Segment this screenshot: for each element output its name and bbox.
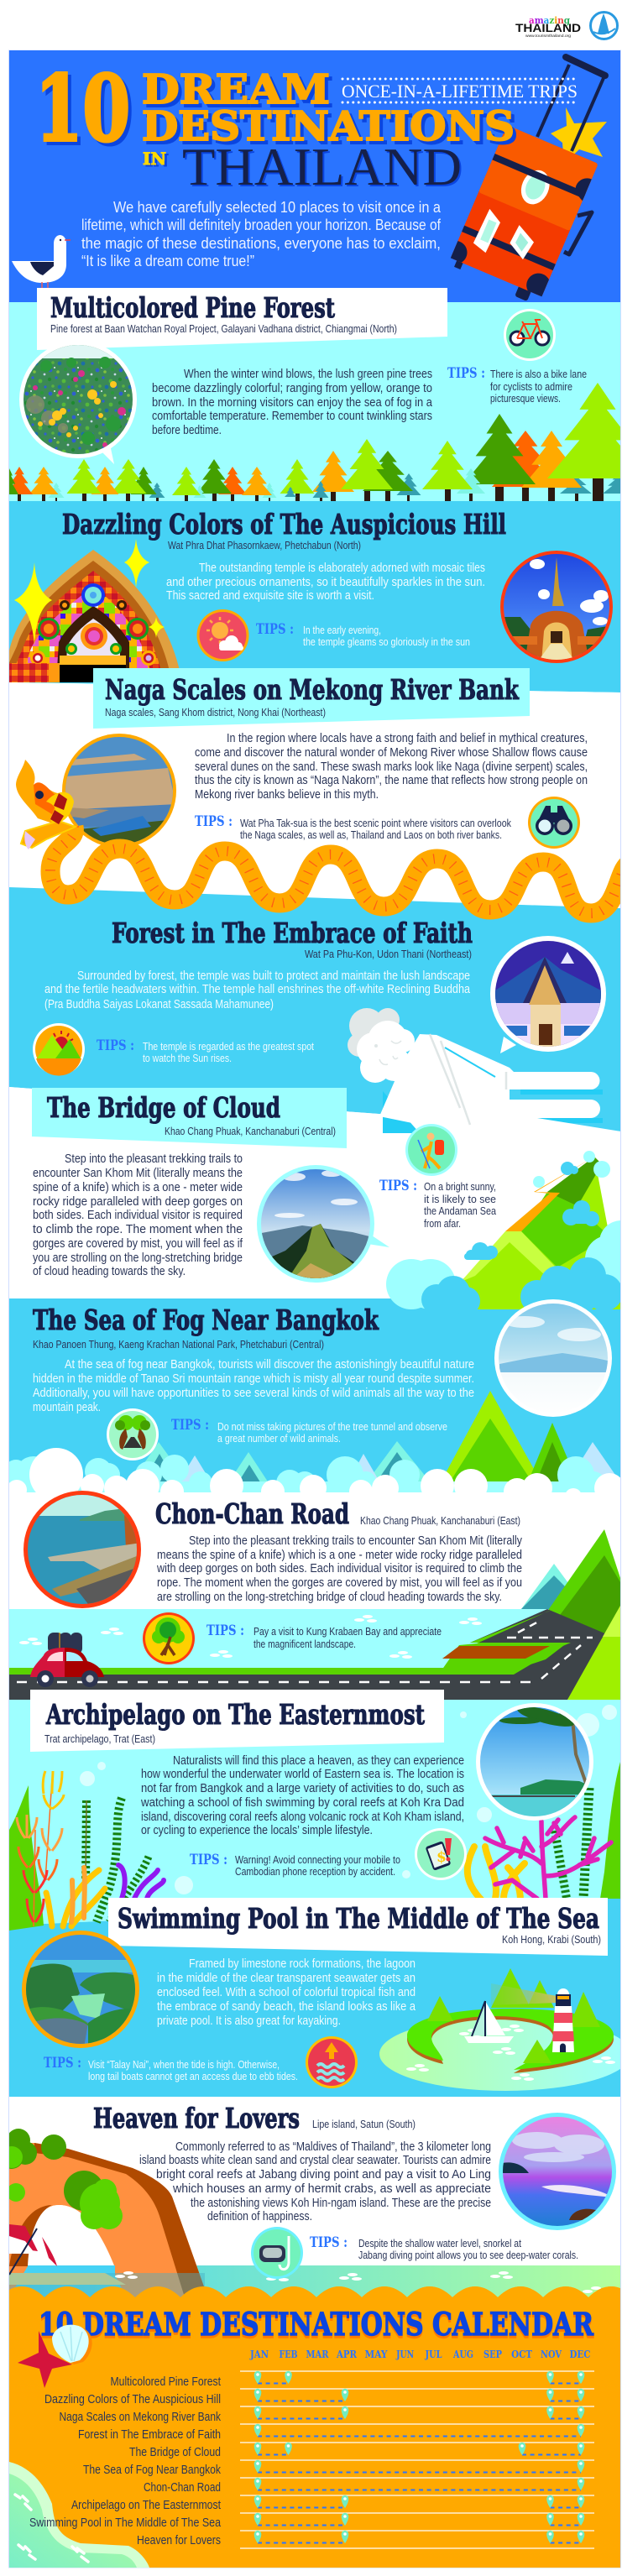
illustration: road mountain xyxy=(521,1529,620,1670)
title box: The Bridge of Cloud xyxy=(47,1091,280,1124)
icon: tree tunnel xyxy=(107,1408,159,1460)
text: Lipe description: Commonly referred to as “Maldives of Thailand”, the 3 kilometer long xyxy=(175,2140,491,2154)
illustration: lagoon island and lighthouse xyxy=(379,1968,622,2091)
panel: Archipelago on The Easternmost xyxy=(9,1690,620,1931)
sparkles xyxy=(14,539,165,646)
icon: phone warning: $ xyxy=(436,1849,447,1866)
tips: sun rises: The temple is regarded as the greatest spot xyxy=(143,1041,314,1053)
clouds xyxy=(4,1448,622,1518)
text: bridge of cloud description: encounter San Khom Mit (literally means the xyxy=(33,1167,243,1180)
text: Lipe description: definition of happiness. xyxy=(207,2210,312,2223)
text: temple description: and other precious ornaments, so it beautifully sparkles in the sun. xyxy=(166,576,485,589)
text: archipelago description: or cycling to experience the locals’ simple lifestyle. xyxy=(141,1824,373,1837)
title: 10 Dream Destinations in Thailand: THAILAND xyxy=(182,137,462,196)
month headers: JUL xyxy=(425,2349,442,2360)
text: introduction: We have carefully selected 10 places to visit once in a xyxy=(113,199,442,216)
tips: early evening: the temple gleams so gloriously in the sun xyxy=(303,636,470,648)
illustration: coral right xyxy=(468,1762,620,1901)
text: lagoon description: private pool. It is also great for kayaking. xyxy=(157,2014,341,2028)
photo: lagoon xyxy=(22,1931,139,2048)
tips: Andaman Sea: On a bright sunny, xyxy=(424,1181,496,1193)
title box xyxy=(108,1898,608,1956)
title: 10 Dream Destinations in Thailand: DESTINATIONS xyxy=(142,103,515,150)
text: bridge of cloud description: Step into the pleasant trekking trails to xyxy=(65,1152,243,1166)
text: sea of fog description: hidden in the middle of Tanao Sri mountain range which is misty all year round despite summer. xyxy=(33,1372,474,1386)
text: pine forest description: comfortable temperature. Remember to count twinkling stars xyxy=(152,410,432,423)
panel: The Bridge of Cloud xyxy=(32,1088,622,1315)
panel: Dazzling Colors of The Auspicious Hill xyxy=(0,508,613,682)
subtitle: once-in-a-lifetime trips: ONCE-IN-A-LIFETIME TRIPS xyxy=(342,81,578,102)
text: bridge of cloud description: of cloud heading towards the sky. xyxy=(33,1265,186,1278)
text: Chon-Chan description: rope. The moment when the gorges are covered by mist, you will feel as if you xyxy=(157,1576,522,1590)
text: archipelago description: Naturalists will find this place a heaven, as they can experience xyxy=(173,1754,464,1768)
title box: Archipelago on The Easternmost xyxy=(45,1698,426,1731)
title box: Naga scales, Sang Khom district, Nong Khai (Northeast) xyxy=(105,706,326,718)
title box: Pine forest at Baan Watchan Royal Project, Galayani Vadhana district, Chiangmai (North) xyxy=(50,322,397,335)
title: Forest in The Embrace of Faith xyxy=(112,917,473,949)
tips: bike lane: for cyclists to admire xyxy=(490,381,572,393)
text: temple description: The outstanding temple is elaborately adorned with mosaic tiles xyxy=(199,562,485,575)
title: Heaven for Lovers xyxy=(93,2102,300,2134)
title: 10 Dream Destinations in Thailand: IN xyxy=(145,150,169,170)
tips: Talay Nai: Visit “Talay Nai”, when the tide is high. Otherwise, xyxy=(88,2059,280,2071)
logo: Amazing Thailand and tourism authority seal xyxy=(515,12,618,39)
destination labels: Naga Scales on Mekong River Bank xyxy=(59,2410,221,2424)
title box: Multicolored Pine Forest xyxy=(50,291,336,324)
destination labels: Multicolored Pine Forest xyxy=(111,2375,222,2389)
text: sea of fog description: At the sea of fog near Bangkok, tourists will discover the astonishingly beautiful nature xyxy=(65,1358,474,1372)
text: lagoon description: the embrace of sandy beach, the island looks as like a xyxy=(157,2000,416,2014)
title: 10 Dream Destinations in Thailand: DESTINATIONS xyxy=(145,107,518,154)
logo: Amazing Thailand and tourism authority seal: www.tourismthailand.org xyxy=(525,34,572,38)
icon: bicycle xyxy=(504,309,556,361)
title: 10 Dream Destinations in Thailand: 10 xyxy=(35,56,130,162)
destination labels: Forest in The Embrace of Faith xyxy=(78,2427,221,2442)
text: archipelago description xyxy=(140,1754,464,1837)
calendar pins xyxy=(254,2371,584,2543)
tips: Andaman Sea: the Andaman Sea xyxy=(424,1205,496,1217)
text: sea of fog description: mountain peak. xyxy=(33,1401,101,1414)
panel: Forest in The Embrace of Faith xyxy=(33,917,621,1133)
month headers: DEC xyxy=(569,2349,591,2360)
text: naga description xyxy=(195,732,588,802)
illustration: seaweed left xyxy=(9,1771,164,1931)
illustration: beach corner xyxy=(9,2462,149,2568)
illustration: road and grass xyxy=(9,1606,620,1700)
tips: Cambodian reception: TIPS : xyxy=(190,1852,227,1868)
text: bridge of cloud description xyxy=(33,1152,243,1278)
title: Chon-Chan Road xyxy=(155,1497,349,1530)
tips: Cambodian reception: Warning! Avoid connecting your mobile to xyxy=(235,1854,400,1866)
photo: island beach xyxy=(476,1696,606,1821)
month headers: FEB xyxy=(279,2349,297,2360)
tips: sun rises: to watch the Sun rises. xyxy=(143,1053,232,1064)
icon: tree xyxy=(143,1612,195,1664)
tips: early evening xyxy=(256,621,470,648)
icon: hiker xyxy=(405,1124,457,1176)
destination labels: Chon-Chan Road xyxy=(144,2480,221,2495)
photo: mountain ridge xyxy=(257,1165,389,1284)
title: 10 Dream Destinations in Thailand xyxy=(42,71,516,186)
text: archipelago description: watching a school of fish swimming by coral reefs at Koh Kra Dad xyxy=(140,1796,464,1810)
text: Chon-Chan description: Step into the pleasant trekking trails to encounter San Khom Mit (literally xyxy=(189,1534,523,1548)
title: 10 Dream Destinations in Thailand: DREAM xyxy=(142,66,330,113)
month headers: AUG xyxy=(452,2349,473,2360)
calendar grid lines xyxy=(240,2371,594,2548)
photo: temple xyxy=(500,551,613,663)
photo: pine forest xyxy=(18,340,138,464)
text: introduction: “It is like a dream come true!” xyxy=(81,253,254,269)
destination labels xyxy=(29,2375,222,2547)
text: temple description xyxy=(166,562,485,603)
title: 10 Dream Destinations in Thailand: THAILAND xyxy=(184,138,463,198)
panel: 10 Dream Destinations Calendar xyxy=(0,2286,622,2568)
text: introduction: lifetime, which will definitely broaden your horizon. Because of xyxy=(81,217,442,233)
text: lagoon description: in the middle of the clear transparent seawater gets an xyxy=(157,1972,416,1985)
location: Khao Panoen Thung, Kaeng Krachan National Park, Phetchaburi (Central) xyxy=(33,1338,324,1351)
tips: sun rises xyxy=(97,1039,314,1062)
month headers xyxy=(249,2349,591,2360)
photo: sea of fog xyxy=(494,1299,612,1417)
tips: Talay Nai: long tail boats cannot get an access due to ebb tides. xyxy=(88,2071,298,2082)
trees row xyxy=(0,383,622,501)
illustration: mountains behind clouds xyxy=(126,1391,617,1498)
tips: Andaman Sea: from afar. xyxy=(424,1218,461,1230)
title: The Sea of Fog Near Bangkok xyxy=(33,1304,379,1336)
tips: snorkel at Jabang xyxy=(310,2234,578,2261)
text: forest temple description xyxy=(44,969,471,1011)
text: forest temple description: and the fertile headwaters within. The temple hall enshrines the off-white Reclining Buddha xyxy=(44,983,471,996)
month headers: APR xyxy=(336,2349,358,2360)
location: Wat Pa Phu-Kon, Udon Thani (Northeast) xyxy=(305,948,472,960)
illustration: rock arch with trees xyxy=(0,2129,605,2298)
icon: red car with luggage xyxy=(30,1633,104,1687)
title box: Koh Hong, Krabi (South) xyxy=(502,1933,601,1946)
tips: tree tunnel: TIPS : xyxy=(171,1417,209,1434)
panel: The Sea of Fog Near Bangkok xyxy=(4,1299,622,1518)
photo: Lipe island xyxy=(499,2113,616,2230)
title: 10 Dream Destinations in Thailand: IN xyxy=(143,149,166,169)
text: forest temple description: (Pra Buddha Saiyas Lokanat Sassada Mahamunee) xyxy=(44,998,274,1011)
tips: Kung Krabaen Bay: TIPS : xyxy=(206,1622,244,1639)
text: temple description: This sacred and exquisite site is worth a visit. xyxy=(166,589,374,603)
tips: Kung Krabaen Bay: the magnificent landscape. xyxy=(254,1638,356,1650)
tips: tree tunnel xyxy=(171,1417,447,1445)
icon: seashell xyxy=(52,2325,92,2364)
month headers: MAR xyxy=(306,2349,329,2360)
text: Chon-Chan description: means the spine of a knife) which is a one - meter wide rocky ridge paralleled xyxy=(157,1549,522,1562)
month headers: SEP xyxy=(483,2349,502,2360)
text: bridge of cloud description: you are strolling on the long-stretching bridge xyxy=(33,1251,243,1265)
destination labels: The Sea of Fog Near Bangkok xyxy=(83,2463,221,2477)
text: sea of fog description xyxy=(33,1358,474,1414)
icon: starfish xyxy=(18,2331,72,2388)
tips: Kung Krabaen Bay: Pay a visit to Kung Krabaen Bay and appreciate xyxy=(254,1626,442,1638)
tips: tree tunnel: a great number of wild animals. xyxy=(217,1433,341,1445)
text: naga description: Mekong river banks believe in this myth. xyxy=(195,788,379,802)
destination labels: Dazzling Colors of The Auspicious Hill xyxy=(44,2392,221,2406)
panel: Multicolored Pine Forest xyxy=(0,288,622,501)
text: Chon-Chan description xyxy=(156,1534,523,1604)
tips: Talay Nai xyxy=(44,2055,298,2082)
month headers: JAN xyxy=(249,2349,269,2360)
destination labels: Heaven for Lovers xyxy=(137,2533,221,2547)
text: lagoon description xyxy=(157,1957,416,2028)
photo: night temple xyxy=(490,936,606,1053)
logo: Amazing Thailand and tourism authority seal: THAILAND xyxy=(515,22,581,34)
text: pine forest description: When the winter wind blows, the lush green pine trees xyxy=(184,368,432,381)
text: bridge of cloud description: spine of a knife) which is a one - meter wide xyxy=(33,1181,243,1194)
icon: high tide xyxy=(306,2036,358,2088)
logo: Amazing Thailand and tourism authority seal: amazing xyxy=(529,15,570,26)
icon: phone warning xyxy=(415,1828,467,1880)
panel: hero header xyxy=(12,56,607,306)
text: Lipe description xyxy=(139,2140,491,2223)
tips: bike lane: There is also a bike lane xyxy=(490,368,587,380)
text: Lipe description: which houses an army of hermit crabs, as well as appreciate xyxy=(172,2182,491,2196)
text: archipelago description: not far from Bangkok and a large variety of activities to do, such as xyxy=(141,1782,464,1795)
tips: early evening: In the early evening, xyxy=(303,624,381,636)
illustration: mosaic temple arch xyxy=(0,550,182,682)
title box xyxy=(32,1088,347,1148)
location: Khao Chang Phuak, Kanchanaburi (East) xyxy=(360,1514,520,1527)
text: archipelago description: island, discovering coral reefs along volcanic rock at Koh Kham island, xyxy=(141,1811,464,1824)
icon: binoculars xyxy=(528,797,580,849)
icon: sun and cloud xyxy=(196,609,248,661)
small clouds xyxy=(19,1615,482,1659)
text: introduction: the magic of these destinations, everyone has to exclaim, xyxy=(81,235,441,252)
destination labels: The Bridge of Cloud xyxy=(129,2445,221,2459)
month headers: NOV xyxy=(541,2349,562,2360)
tips: early evening: TIPS : xyxy=(256,621,294,638)
tips: snorkel at Jabang: Despite the shallow water level, snorkel at xyxy=(358,2238,521,2249)
tips: tree tunnel: Do not miss taking pictures of the tree tunnel and observe xyxy=(217,1421,447,1433)
text: Lipe description: bright coral reefs at Jabang diving point and pay a visit to Ao Ling xyxy=(156,2168,491,2182)
tips: Andaman Sea: it is likely to see xyxy=(424,1194,496,1205)
month headers: OCT xyxy=(511,2349,532,2360)
tips: Wat Pha Tak-sua: TIPS : xyxy=(195,813,233,830)
tips: bike lane: TIPS : xyxy=(447,365,485,382)
tips: bike lane: picturesque views. xyxy=(490,393,561,405)
bubbles xyxy=(80,1705,617,1894)
tips: Cambodian reception: Cambodian phone reception by accident. xyxy=(235,1866,395,1878)
text: bridge of cloud description: both sides. Each individual visitor is required xyxy=(33,1209,243,1222)
location: Wat Phra Dhat Phasornkaew, Phetchabun (North) xyxy=(168,539,361,551)
text: bridge of cloud description: to climb the rope. The moment when the xyxy=(33,1223,243,1236)
text: pine forest description: brown. In the morning visitors can enjoy the sea of fog in a xyxy=(152,396,433,410)
text: introduction xyxy=(81,199,442,269)
tips: Wat Pha Tak-sua: the Naga scales, as well as, Thailand and Laos on both river banks. xyxy=(240,829,502,841)
title: 10 Dream Destinations in Thailand: DREAM xyxy=(145,70,333,117)
tips: Wat Pha Tak-sua xyxy=(195,813,512,841)
month headers: MAY xyxy=(364,2349,388,2360)
icon: white bird xyxy=(12,235,71,289)
illustration: mountain and clouds xyxy=(386,1151,622,1315)
text: bridge of cloud description: rocky ridge paralleled with deep gorges on xyxy=(33,1195,243,1209)
destination labels: Swimming Pool in The Middle of The Sea xyxy=(29,2516,222,2530)
icon: suitcase xyxy=(447,57,605,306)
icon: snorkel mask xyxy=(251,2227,303,2279)
title box: Trat archipelago, Trat (East) xyxy=(44,1732,155,1745)
text: Lipe description: the astonishing views Koh Hin-ngam island. These are the precise xyxy=(191,2197,491,2210)
text: Chon-Chan description: are strolling on the long-stretching bridge of cloud heading towards the sky. xyxy=(157,1591,502,1604)
text: bridge of cloud description: gorges are covered by mist, you will feel as if xyxy=(33,1237,243,1251)
tips: Wat Pha Tak-sua: Wat Pha Tak-sua is the best scenic point where visitors can overlook xyxy=(240,818,512,829)
panel: Swimming Pool in The Middle of The Sea xyxy=(22,1898,622,2091)
panel: Heaven for Lovers xyxy=(0,2102,616,2298)
panel: Naga Scales on Mekong River Bank xyxy=(16,668,622,913)
tips: sun rises: TIPS : xyxy=(97,1037,134,1054)
text: archipelago description: how wonderful the underwater world of Eastern sea is. The location is xyxy=(141,1768,464,1781)
tips: Andaman Sea xyxy=(379,1178,496,1230)
text: lagoon description: Framed by limestone rock formations, the lagoon xyxy=(189,1957,416,1971)
icon: yellow star xyxy=(551,107,607,157)
text: pine forest description xyxy=(152,368,433,437)
title box: Khao Chang Phuak, Kanchanaburi (Central) xyxy=(165,1125,336,1137)
tips: snorkel at Jabang: Jabang diving point allows you to see deep-water corals. xyxy=(358,2249,578,2261)
text: forest temple description: Surrounded by forest, the temple was built to protect and maintain the lush landscape xyxy=(77,969,470,983)
tips: Talay Nai: TIPS : xyxy=(44,2055,81,2072)
photo: coastal road xyxy=(24,1491,143,1612)
title box xyxy=(37,288,447,350)
title box xyxy=(93,668,530,729)
text: pine forest description: become dazzlingly colorful; ranging from yellow, orange to xyxy=(152,382,432,395)
text: Chon-Chan description: with deep gorges on both sides. Each individual visitor is required to climb the xyxy=(156,1562,522,1575)
destination labels: Archipelago on The Easternmost xyxy=(71,2498,222,2512)
tips: snorkel at Jabang: TIPS : xyxy=(310,2234,348,2251)
tips: Andaman Sea: TIPS : xyxy=(379,1178,417,1194)
location: Lipe island, Satun (South) xyxy=(312,2118,416,2130)
title: 10 Dream Destinations in Thailand: 10 xyxy=(39,60,133,165)
panel: Chon-Chan Road xyxy=(9,1491,620,1700)
title box xyxy=(30,1690,444,1752)
icon: sunrise mountains xyxy=(33,1023,85,1076)
text: pine forest description: before bedtime. xyxy=(152,424,222,437)
text: sea of fog description: Additionally, you will have opportunities to see several kinds of wild animals all the way to the xyxy=(33,1387,474,1400)
calendar dotted ranges xyxy=(258,2384,581,2543)
text: lagoon description: enclosed feel. With a school of colorful tropical fish and xyxy=(157,1986,416,1999)
photo: naga scales sand xyxy=(62,734,176,849)
tips: Kung Krabaen Bay xyxy=(206,1622,442,1650)
illustration: naga serpent xyxy=(16,760,622,913)
text: Lipe description: island boasts white clean sand and crystal clear seawater. Tourists can admire xyxy=(139,2154,491,2167)
tips: Cambodian reception xyxy=(190,1852,400,1878)
month headers: JUN xyxy=(395,2349,414,2360)
illustration: reclining Buddha xyxy=(348,1008,621,1133)
tips: bike lane xyxy=(447,365,587,405)
